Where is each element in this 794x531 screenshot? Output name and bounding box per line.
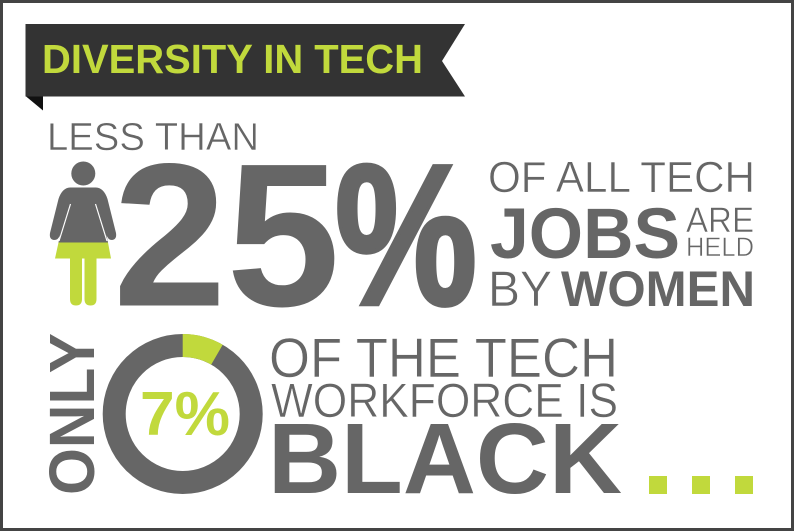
text: of all tech jobs are held by women: OF ALL TECH bbox=[488, 153, 755, 202]
text: of all tech jobs are held by women: ARE bbox=[686, 201, 754, 240]
big number: 25%: 25 bbox=[113, 122, 340, 350]
donut label: 7% bbox=[140, 380, 230, 449]
title: DIVERSITY IN TECH bbox=[42, 36, 423, 82]
text: of the tech workforce is black: WORKFORCE IS bbox=[271, 375, 618, 428]
ellipsis dots bbox=[649, 476, 753, 494]
text: less than: LESS THAN bbox=[47, 116, 259, 159]
text: of all tech jobs are held by women: JOBS bbox=[490, 195, 680, 274]
text: of all tech jobs are held by women bbox=[488, 153, 755, 317]
text: of the tech workforce is black: OF THE TECH bbox=[269, 326, 618, 389]
vertical text: only: ONLY bbox=[36, 333, 108, 495]
big number: 25%: % bbox=[335, 124, 477, 347]
text: of the tech workforce is black: BLACK bbox=[268, 403, 622, 515]
icon: woman figure bbox=[50, 162, 116, 306]
big number: 25% bbox=[113, 122, 477, 350]
text: of the tech workforce is black bbox=[268, 326, 622, 515]
text: of all tech jobs are held by women: WOMEN bbox=[561, 261, 755, 317]
title banner bbox=[26, 24, 465, 110]
text: of all tech jobs are held by women: HELD bbox=[686, 232, 754, 262]
text: of all tech jobs are held by women: BY bbox=[488, 261, 552, 317]
donut chart: 7% bbox=[114, 334, 251, 482]
